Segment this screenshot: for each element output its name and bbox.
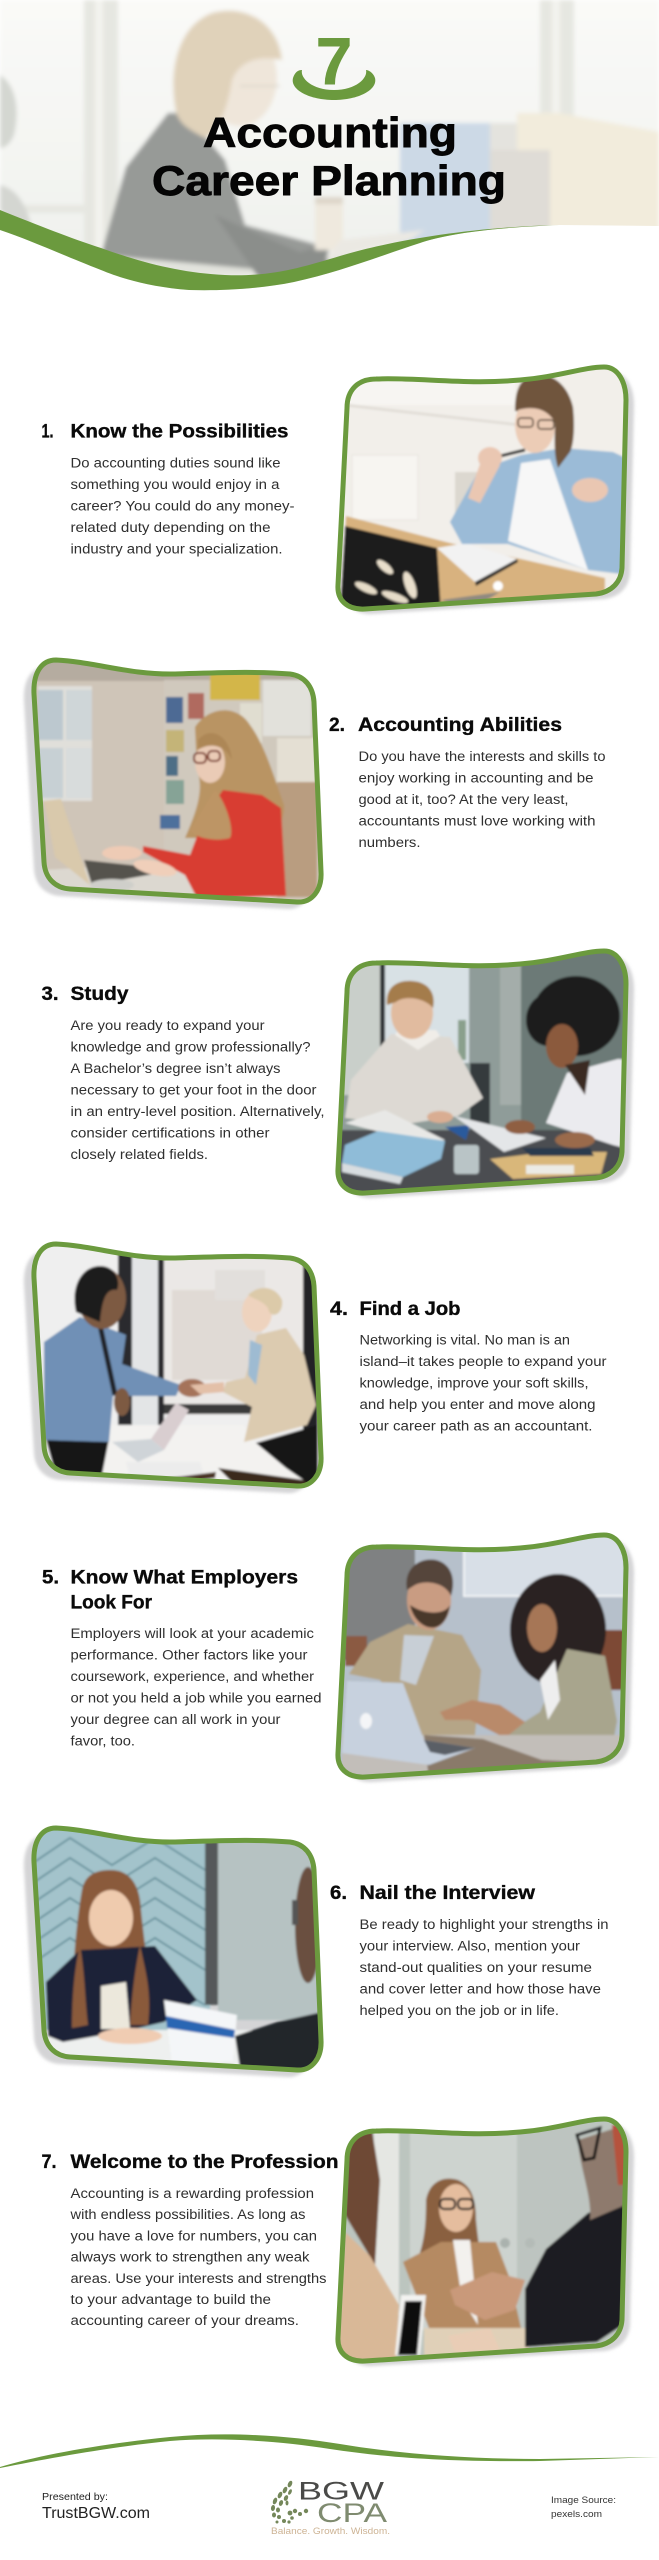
body text <box>69 2186 327 2328</box>
image source: pexels.com <box>551 2509 602 2520</box>
body text: Accounting is a rewarding profession <box>70 2186 314 2201</box>
body text: closely related fields. <box>70 1147 208 1162</box>
body text: your degree can all work in your <box>70 1712 281 1727</box>
body text: Be ready to highlight your strengths in <box>360 1917 608 1932</box>
heading: 7. <box>42 2152 56 2173</box>
body text: and help you enter and move along <box>360 1397 596 1412</box>
presented by: TrustBGW.com <box>42 2505 150 2522</box>
footer green wave <box>0 2434 659 2468</box>
photo: woman thinking at desk <box>335 360 634 615</box>
body text: and cover letter and how those have <box>360 1982 601 1996</box>
body text: Are you ready to expand your <box>70 1018 265 1033</box>
panel: step 4 <box>24 1240 607 1500</box>
body text <box>70 456 294 556</box>
body text: areas. Use your interests and strengths <box>70 2271 327 2286</box>
body text: helped you on the job or in life. <box>360 2003 559 2018</box>
image source <box>551 2495 616 2520</box>
body text: in an entry-level position. Alternatively, <box>70 1104 324 1119</box>
photo: handshake with woman in glasses <box>335 2115 634 2366</box>
body text: Do accounting duties sound like <box>70 456 280 470</box>
body text: good at it, too? At the very least, <box>358 792 568 807</box>
logo: BGW CPA: CPA <box>317 2498 387 2528</box>
panel: step 2 <box>24 655 605 910</box>
body text <box>358 749 606 850</box>
body text: to your advantage to build the <box>70 2292 271 2307</box>
header banner <box>0 0 659 330</box>
heading: Welcome to the Profession <box>70 2152 338 2173</box>
body text: something you would enjoy in a <box>70 477 280 492</box>
number 7 with ring: 7 <box>316 24 352 98</box>
body text: knowledge and grow professionally? <box>70 1040 310 1054</box>
presented by <box>42 2491 150 2522</box>
footer <box>0 2434 659 2537</box>
body text: favor, too. <box>70 1734 135 1748</box>
title text <box>152 109 506 204</box>
logo: BGW CPA <box>271 2478 390 2537</box>
body text <box>360 1332 607 1434</box>
green wave <box>0 210 560 290</box>
photo: two colleagues reviewing documents <box>335 945 634 1200</box>
heading: Study <box>70 984 129 1005</box>
body text: performance. Other factors like your <box>70 1648 308 1662</box>
heading <box>42 1568 298 1614</box>
body text: accounting career of your dreams. <box>70 2313 299 2328</box>
title block <box>152 24 506 204</box>
panel: step 6 <box>24 1825 608 2080</box>
body text: enjoy working in accounting and be <box>358 770 594 786</box>
heading: Look For <box>70 1592 153 1614</box>
heading: Accounting Abilities <box>358 715 562 736</box>
number 7 with ring <box>293 24 375 100</box>
body text: career? You could do any money- <box>70 498 294 514</box>
body text: coursework, experience, and whether <box>70 1669 315 1684</box>
heading: Know the Possibilities <box>70 422 288 442</box>
body text: your career path as an accountant. <box>360 1418 592 1434</box>
body text <box>360 1917 608 2018</box>
body text <box>70 1626 322 1748</box>
body text: industry and your specialization. <box>70 542 282 556</box>
body text: necessary to get your foot in the door <box>70 1082 317 1098</box>
photo: smiling woman in interview <box>24 1825 325 2080</box>
image source: Image Source: <box>551 2495 616 2506</box>
panel: step 7 <box>42 2115 634 2366</box>
body text: with endless possibilities. As long as <box>69 2207 306 2222</box>
heading: 5. <box>42 1568 59 1588</box>
photo: colleagues discussing at laptop <box>335 1530 640 1790</box>
body text: Networking is vital. No man is an <box>360 1332 570 1348</box>
panel: step 3 <box>42 945 634 1200</box>
logo: BGW CPA: Balance. Growth. Wisdom. <box>271 2526 390 2537</box>
heading: 6. <box>330 1883 347 1904</box>
heading: 1. <box>42 422 54 442</box>
body text: your interview. Also, mention your <box>360 1938 581 1954</box>
heading: Know What Employers <box>70 1568 298 1588</box>
heading: Nail the Interview <box>360 1883 535 1904</box>
panel: step 5 <box>42 1530 640 1790</box>
body text <box>70 1018 324 1162</box>
panel: step 1 <box>42 360 634 615</box>
body text: or not you held a job while you earned <box>70 1690 322 1706</box>
body text: stand-out qualities on your resume <box>360 1960 592 1975</box>
title text: Career Planning <box>152 157 506 204</box>
body text: Do you have the interests and skills to <box>358 749 606 764</box>
body text: you have a love for numbers, you can <box>70 2228 317 2244</box>
body text: consider certifications in other <box>70 1126 270 1140</box>
body text: island–it takes people to expand your <box>360 1354 607 1369</box>
body text: knowledge, improve your soft skills, <box>360 1376 588 1390</box>
photo: handshake at office window <box>24 1240 325 1500</box>
heading: 3. <box>42 984 58 1005</box>
body text: A Bachelor’s degree isn’t always <box>70 1061 281 1076</box>
logo: BGW CPA: BGW <box>298 2478 385 2506</box>
title text: Accounting <box>203 109 457 156</box>
body text: numbers. <box>358 835 420 850</box>
photo: woman in red at laptop <box>24 655 325 910</box>
body text: related duty depending on the <box>70 520 270 535</box>
presented by: Presented by: <box>42 2491 108 2503</box>
heading: 2. <box>329 715 345 736</box>
body text: always work to strengthen any weak <box>70 2250 310 2264</box>
white area below the wave <box>0 225 659 330</box>
heading <box>42 984 129 1005</box>
hero photo: woman at desk, faded <box>0 0 659 300</box>
heading: 4. <box>330 1299 348 1320</box>
heading: Find a Job <box>360 1299 460 1320</box>
body text: Employers will look at your academic <box>70 1626 314 1641</box>
body text: accountants must love working with <box>358 814 596 828</box>
